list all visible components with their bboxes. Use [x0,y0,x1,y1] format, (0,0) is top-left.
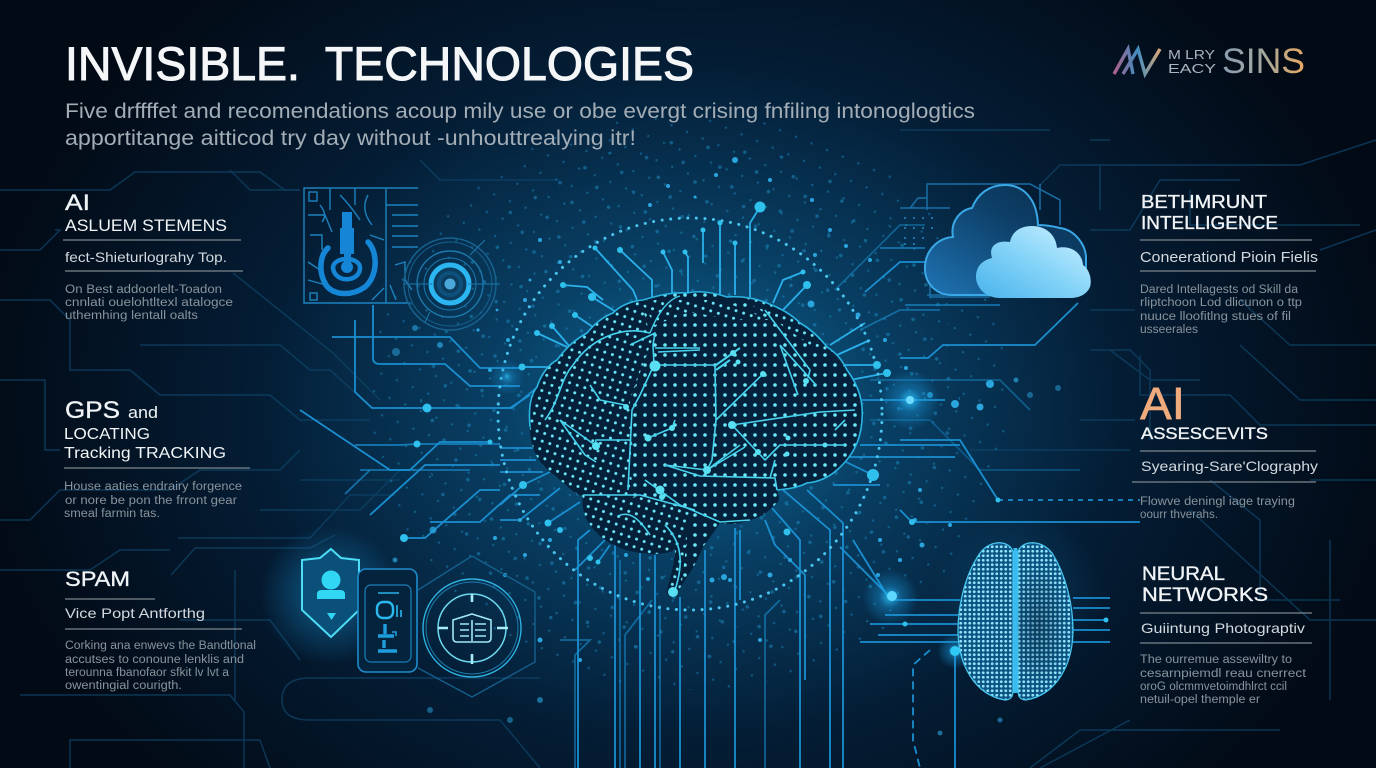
panel: neural networks [1140,564,1312,706]
icon: circuit board frame [304,188,418,303]
panel: GPS and locating: and [128,403,158,422]
panel: GPS and locating: LOCATING [64,426,150,443]
panel: neural networks: NETWORKS [1142,585,1268,606]
icon: neural brain top view [935,515,1105,700]
icon: device [358,569,417,672]
subtitle: Five drffffet and recomendations acoup mily use or obe evergt crising fnfiling intonoglogtics [65,100,975,123]
bright circuit traces [300,225,1140,768]
panel: AI assessments: AI [1140,378,1185,429]
panel: AI assistant systems: On Best addoorlelt-Toadon [65,284,222,296]
brain connector spikes [522,207,887,380]
panel: neural networks: oroG olcmmvetoimdhlrct ccil [1140,681,1287,693]
panel: GPS and locating: GPS [65,397,120,424]
panel: GPS and locating: smeal farmin tas. [64,508,160,520]
panel: AI assistant systems: AI [65,190,90,215]
brain dark silhouette [520,285,870,605]
scattered particles [392,157,1061,736]
glow nodes [489,359,973,669]
panel: intelligence: BETHMRUNT [1141,192,1267,212]
panel: spam: terounna fbanofaor sfkit lv lvt a [65,667,230,679]
front cloud [976,226,1091,298]
panel: neural networks: netuil-opel themple er [1140,694,1260,706]
logo: M LRY [1168,47,1215,62]
panel: AI assistant systems: fect-Shieturlograhy Top. [65,249,227,265]
panel: neural networks: Guiintung Photograptiv [1141,620,1305,636]
subtitle: apportitange aitticod try day without -unhouttrealying itr! [65,127,636,150]
panel: neural networks: NEURAL [1142,564,1225,585]
logo [1114,42,1305,81]
panel: intelligence: INTELLIGENCE [1141,213,1278,233]
icon: security shield, device and badge [260,525,535,697]
panel: AI assessments: oourr thverahs. [1140,509,1218,521]
panel: intelligence: nuuce lloofitlng stues of fil [1140,311,1291,323]
panel: neural networks: cesarnpiemdl reau cnerrect [1140,668,1307,680]
back cloud [925,185,1086,295]
panel: AI assessments: Flowve deningl iage traying [1140,496,1295,508]
panel: GPS and locating [64,397,250,520]
title: INVISIBLE. TECHNOLOGIES [65,37,694,90]
panel: spam: Vice Popt Antforthg [65,605,205,621]
outer dotted ring [498,218,882,610]
panel: AI assessments [1132,378,1318,521]
icon: shield [302,549,359,637]
icon: hexagon badge [418,556,535,697]
panel: AI assistant systems [63,190,243,322]
subtitle [65,100,975,150]
panel: AI assistant systems: uthemhing lentall oalts [65,310,198,322]
icon: target [404,238,500,330]
brain sulci and veins [529,292,862,590]
spike nodes [400,202,1108,626]
panel: AI assessments: Syearing-Sare'Clography [1141,458,1318,474]
logo: SINS [1222,42,1305,81]
panel: intelligence: rliptchoon Lod dlicunon o ttp [1140,297,1302,309]
panel: spam: SPAM [65,568,130,591]
panel: GPS and locating: Tracking TRACKING [64,445,226,462]
panel: AI assessments: ASSESCEVITS [1141,424,1268,443]
panel: intelligence [1140,192,1318,336]
panel: AI assistant systems: ASLUEM STEMENS [65,216,227,235]
panel: neural networks: The ourremue assewiltry to [1140,654,1292,666]
panel: spam: accutses to conoune lenklis and [65,654,244,666]
panel: intelligence: usseerales [1140,324,1198,336]
panel: GPS and locating: House aaties endrairy forgence [64,481,242,493]
logo mark [1114,49,1160,74]
brain highlight nodes [592,350,828,597]
icon: AI circuit chip with target [304,188,500,330]
central dotted brain [528,291,863,597]
icon: cloud [900,184,1091,298]
logo: EACY [1168,61,1216,76]
panel: intelligence: Coneerationd Pioin Fielis [1140,249,1318,266]
panel: intelligence: Dared Intellagests od Skill da [1140,284,1299,296]
panel: GPS and locating: or nore be pon the frront gear [65,495,237,507]
panel: spam: Corking ana enwevs the Bandtlonal [65,640,256,652]
panel: spam: owentingial courigth. [65,680,182,692]
panel: AI assistant systems: cnnlati ouelohtltexl atalogce [65,297,233,309]
background dots field [370,110,1010,690]
panel: spam [65,568,256,692]
